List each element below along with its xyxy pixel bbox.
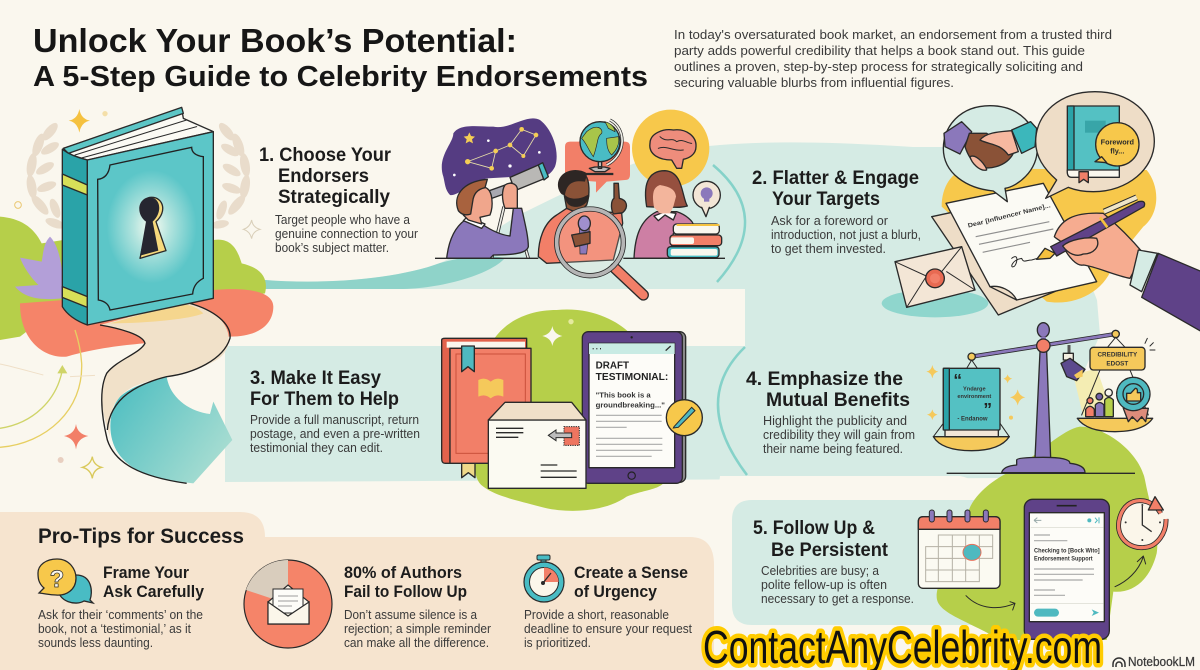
step 3 text: postage, and even a pre-written <box>250 427 420 441</box>
tip 1 text: Ask Carefully <box>103 582 204 601</box>
illustration: step 4 balance scale: “ <box>953 370 962 390</box>
step 3 text: testimonial they can edit. <box>250 441 383 455</box>
pillar <box>1035 352 1051 458</box>
intro paragraph: securing valuable blurbs from influential figures. <box>674 76 954 90</box>
illustration: step 1 people and research <box>435 110 725 295</box>
illustration: step 5 calendar, phone and clock: Endorsement Support <box>1034 557 1093 563</box>
illustration: step 4 balance scale <box>926 323 1155 473</box>
step 3 text: For Them to Help <box>250 389 399 410</box>
intro paragraph <box>674 28 1112 90</box>
tip 2 text: rejection; a simple reminder <box>344 622 491 636</box>
pencil badge <box>666 400 702 436</box>
illustration: step 3 manuscript, envelope and tablet: DRAFT <box>596 360 629 371</box>
tip 1 text: Frame Your <box>103 563 189 582</box>
illustration: step 4 balance scale: ” <box>983 399 992 419</box>
man with telescope <box>492 207 528 258</box>
pen and hand <box>1054 213 1143 278</box>
yellow blob <box>942 168 1156 303</box>
illustration: step 3 manuscript, envelope and tablet <box>442 309 702 511</box>
step 4 text: credibility they will gain from <box>763 428 915 442</box>
tip 1 text <box>38 563 204 650</box>
step 5 text <box>753 518 914 606</box>
step 2 text: to get them invested. <box>771 242 886 256</box>
title: Unlock Your Book’s Potential: <box>33 22 517 59</box>
panel: pro-tips <box>0 512 714 670</box>
icon: chat bubbles with question mark <box>38 559 93 603</box>
envelope with wax seal <box>895 247 975 307</box>
illustration: step 2 letter and handshake: Dear [Influencer Name]... <box>967 202 1052 230</box>
tip 1 text: Ask for their ‘comments’ on the <box>38 608 203 622</box>
step 3 text: 3. Make It Easy <box>250 368 381 389</box>
intro paragraph: In today's oversaturated book market, an endorsement from a trusted third <box>674 28 1112 42</box>
step 1 text: genuine connection to your <box>275 227 418 241</box>
tip 3 text: is prioritized. <box>524 636 591 650</box>
tip 2 text: Don’t assume silence is a <box>344 608 477 622</box>
tip 3 text: Create a Sense <box>574 563 688 582</box>
presenter with beard <box>538 208 623 263</box>
tip 3 text: deadline to ensure your request <box>524 622 693 636</box>
speech bubble <box>565 142 630 193</box>
ribbon cream part <box>100 303 229 437</box>
tip 3 text: of Urgency <box>574 582 658 601</box>
shirt cuff and sleeve <box>1130 250 1157 292</box>
step 4 text: their name being featured. <box>763 442 903 456</box>
illustration: step 2 letter and handshake: Foreword <box>1101 137 1134 146</box>
tip 3 text: Provide a short, reasonable <box>524 608 669 622</box>
step 3 text: Provide a full manuscript, return <box>250 413 419 427</box>
spine <box>62 149 87 325</box>
step 5 text: polite fellow-up is often <box>761 578 887 592</box>
title: A 5-Step Guide to Celebrity Endorsements <box>33 61 648 93</box>
title <box>33 22 648 93</box>
tip 2 text: can make all the difference. <box>344 636 489 650</box>
step 2 text: introduction, not just a blurb, <box>771 228 921 242</box>
speech bubble: handshake <box>943 106 1037 202</box>
woman with idea <box>632 110 709 187</box>
step 1 text: Target people who have a <box>275 213 410 227</box>
illustration: step 4 balance scale: EDOST <box>1106 361 1128 368</box>
step 1 text: Strategically <box>278 187 390 208</box>
purple night sky cloud <box>442 118 557 195</box>
illustration: step 5 calendar, phone and clock: Checking to [Bock Wito] <box>1034 549 1100 555</box>
stage light <box>1064 345 1073 358</box>
green blob <box>475 309 663 511</box>
step 4 text: 4. Emphasize the <box>746 369 903 390</box>
coral blob <box>20 289 273 357</box>
clock with arrow <box>1115 556 1146 587</box>
right pan with credibility boost <box>1082 337 1148 415</box>
step 1 text: Endorsers <box>278 166 369 187</box>
illustration: step 3 manuscript, envelope and tablet: "This book is a <box>596 390 651 399</box>
icon: chat bubbles with question mark: ? <box>50 566 64 593</box>
step 5 text: Be Persistent <box>771 540 889 561</box>
purple leaves <box>15 237 63 299</box>
book pages <box>63 108 213 160</box>
step 3 text <box>250 368 420 455</box>
tip 1 text: book, not a ‘testimonial,’ as it <box>38 622 191 636</box>
icon: stopwatch <box>524 555 564 602</box>
step 4 text <box>746 369 915 456</box>
illustration: step 2 letter and handshake: fly... <box>1110 146 1124 155</box>
step 2 text: Your Targets <box>772 189 880 210</box>
ground line <box>435 256 725 260</box>
tablet <box>587 332 686 482</box>
step 5 text: 5. Follow Up & <box>753 518 875 539</box>
speech bubble: foreword <box>1036 92 1154 198</box>
step 5 text: necessary to get a response. <box>761 592 914 606</box>
illustration: step 3 manuscript, envelope and tablet: TESTIMONIAL: <box>596 372 668 383</box>
background path bands <box>225 142 1100 640</box>
illustration: step 3 manuscript, envelope and tablet: groundbreaking..." <box>596 400 665 409</box>
step 5 text: Celebrities are busy; a <box>761 564 879 578</box>
NotebookLM badge: NotebookLM <box>1128 655 1195 669</box>
intro paragraph: outlines a proven, step-by-step process for strategically soliciting and <box>674 60 1083 74</box>
letter sheets <box>932 212 1067 315</box>
tip 2 text: Fail to Follow Up <box>344 582 467 601</box>
illustration: step 5 green blob <box>937 427 1157 640</box>
step 2 text: 2. Flatter & Engage <box>752 168 919 189</box>
step 1 text: book’s subject matter. <box>275 241 389 255</box>
tip 2 text: 80% of Authors <box>344 563 462 582</box>
globe <box>589 160 610 172</box>
laurels <box>25 120 252 231</box>
step 2 text <box>752 168 921 256</box>
gold sparkles <box>926 365 1025 420</box>
step 2 text: Ask for a foreword or <box>771 214 888 228</box>
illustration: book with keyhole and ribbon <box>0 107 273 483</box>
green blobs <box>0 217 266 340</box>
illustration: step 5 calendar, phone and clock <box>918 497 1166 639</box>
illustration: step 4 balance scale: CREDIBILITY <box>1097 352 1138 359</box>
illustration: step 4 balance scale: Yndarge <box>963 387 986 393</box>
phone <box>1024 499 1109 639</box>
step 1 text: 1. Choose Your <box>259 145 392 166</box>
step 1 text <box>259 145 418 255</box>
step 4 text: Mutual Benefits <box>766 390 910 411</box>
return envelope <box>488 420 586 488</box>
illustration: step 4 balance scale: environment <box>957 394 991 400</box>
beam <box>972 334 1116 357</box>
intro paragraph: party adds powerful credibility that helps a book stand out. This guide <box>674 44 1085 58</box>
step 4 text: Highlight the publicity and <box>763 414 907 428</box>
keyhole <box>140 197 166 258</box>
tip 1 text: sounds less daunting. <box>38 636 153 650</box>
decorative stars and arrows <box>69 109 90 133</box>
tip 3 text <box>524 563 693 650</box>
red manuscript book <box>462 463 475 478</box>
left pan with testimonial book <box>933 360 1009 437</box>
magnifying glass with microphone <box>615 268 643 295</box>
spotlight beam <box>1073 368 1113 417</box>
calendar <box>918 517 1000 588</box>
tip 2 text <box>344 563 491 650</box>
teal shadow <box>882 289 988 317</box>
icon: 80 percent pie with envelope <box>244 560 332 648</box>
pro-tips heading: Pro-Tips for Success <box>38 525 244 548</box>
illustration: step 2 letter and handshake <box>882 92 1200 332</box>
book stack <box>673 224 719 234</box>
illustration: step 4 balance scale: - Endanow <box>957 416 988 422</box>
